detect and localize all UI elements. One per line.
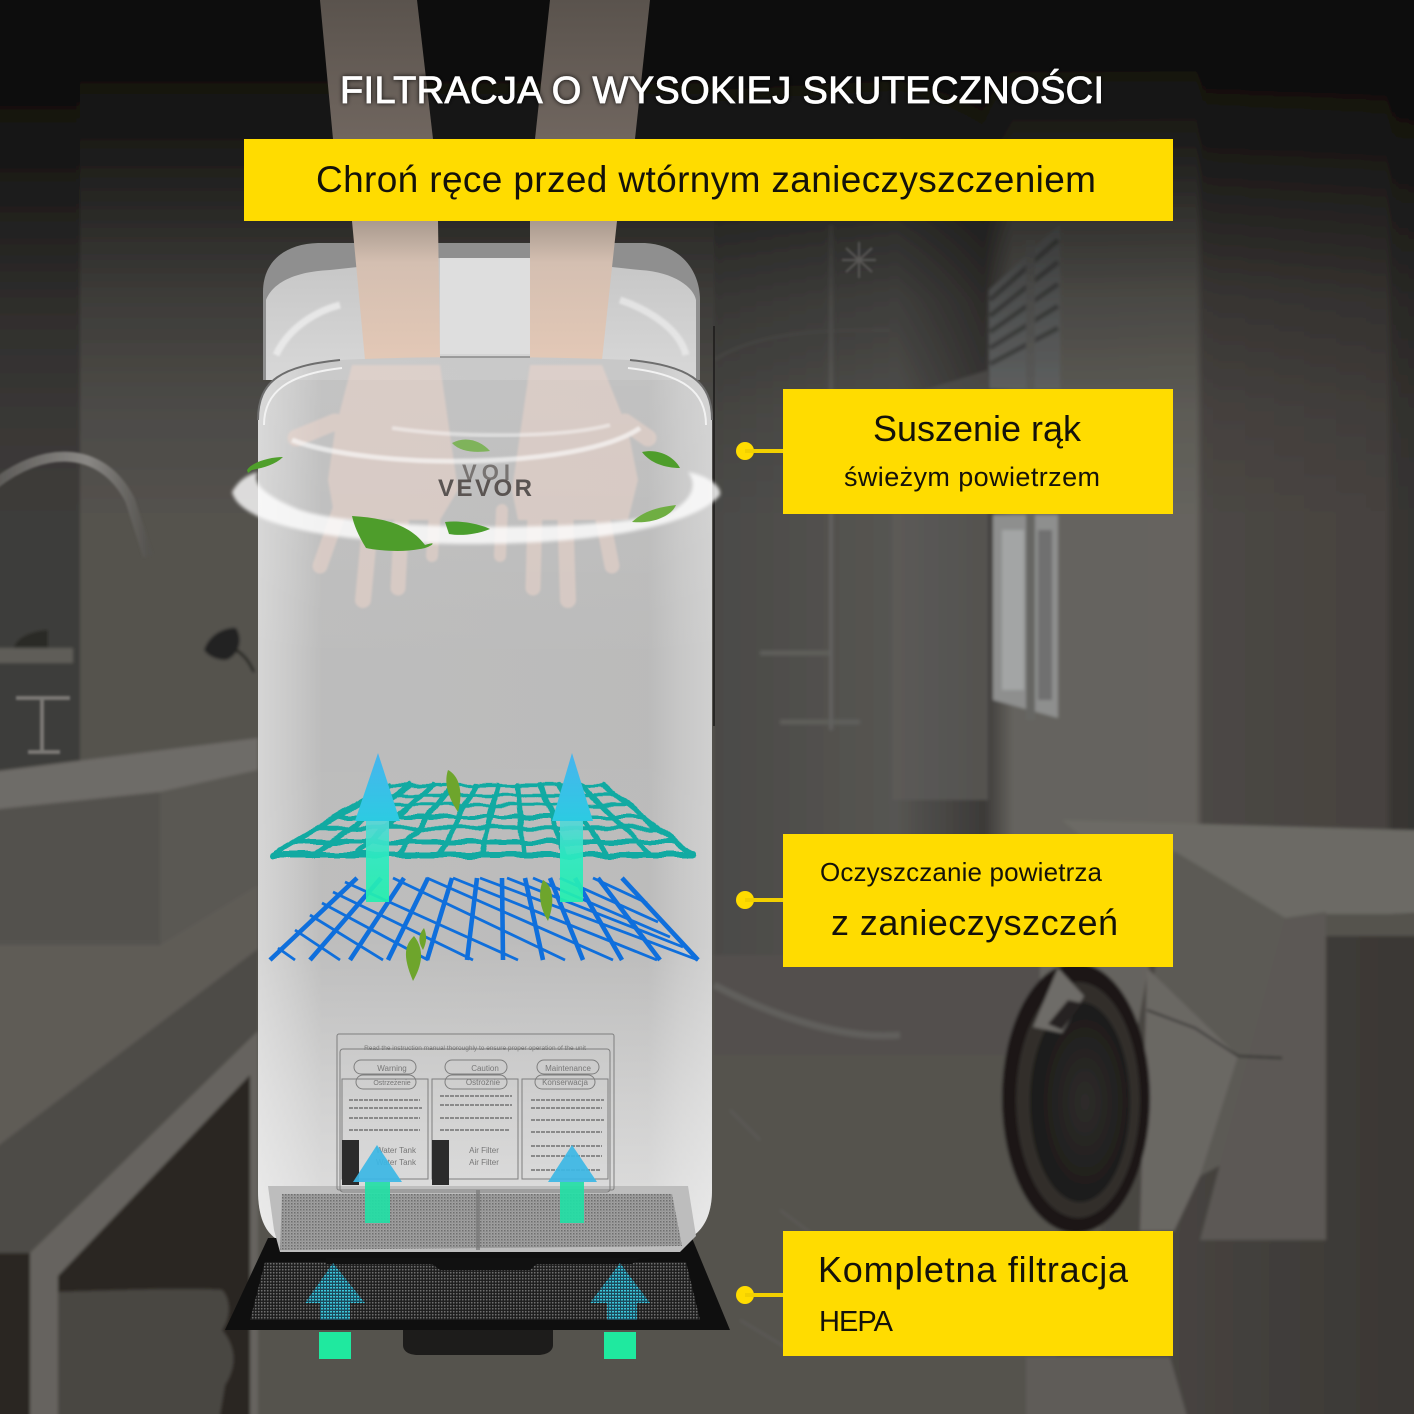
dryer main body bbox=[258, 326, 714, 1245]
background: lower table bbox=[0, 949, 258, 1414]
label text: Konserwacja bbox=[542, 1078, 588, 1087]
background: sink counter bbox=[0, 738, 258, 1152]
green square: right bbox=[604, 1332, 636, 1359]
connector: HEPA bbox=[736, 1286, 783, 1304]
hands seen through dryer bbox=[296, 365, 648, 600]
background: window pane bbox=[993, 515, 1058, 720]
VEVOR logo on dryer: VEVOR bbox=[438, 475, 532, 502]
callout: complete HEPA filtration: HEPA bbox=[819, 1306, 894, 1338]
label text: Air Filter bbox=[469, 1158, 499, 1167]
green square: left bbox=[319, 1332, 351, 1359]
callout: hand drying with fresh air: Suszenie rąk bbox=[873, 408, 1082, 449]
callout: hand drying with fresh air: świeżym powietrzem bbox=[844, 462, 1100, 492]
label text: Ostrożnie bbox=[466, 1078, 501, 1087]
airflow rings bbox=[232, 425, 720, 544]
callout: air cleaning: z zanieczyszczeń bbox=[831, 902, 1118, 943]
label text: Maintenance bbox=[545, 1064, 591, 1073]
lower HEPA mesh bbox=[250, 1262, 700, 1320]
arm: left forearm bbox=[352, 221, 440, 360]
left hand bbox=[296, 365, 458, 600]
background: washer door bbox=[1002, 963, 1150, 1233]
lower mesh frame bbox=[225, 1238, 730, 1330]
frame handle bbox=[403, 1330, 553, 1355]
dryer upper cap bbox=[263, 243, 700, 380]
leaves on filters bbox=[406, 770, 552, 981]
callout: complete HEPA filtration bbox=[783, 1231, 1173, 1356]
label text: Caution bbox=[471, 1064, 499, 1073]
background: lighter shower wall bbox=[892, 370, 988, 800]
title: FILTRACJA O WYSOKIEJ SKUTECZNOŚCI bbox=[340, 67, 1104, 112]
arrow: upper left airflow bbox=[355, 753, 400, 902]
background: ceiling light bbox=[842, 242, 876, 278]
arrow: lower left airflow bbox=[353, 1145, 402, 1223]
label text: Water Tank bbox=[376, 1158, 417, 1167]
right hand bbox=[500, 365, 648, 600]
label text: Water Tank bbox=[376, 1146, 417, 1155]
connector: fresh air bbox=[736, 442, 783, 460]
connector: air cleaning bbox=[736, 891, 783, 909]
subtitle banner: Chroń ręce przed wtórnym zanieczyszczeniem bbox=[316, 159, 1096, 200]
label text: Warning bbox=[377, 1064, 407, 1073]
arrow: lower right airflow bbox=[548, 1145, 597, 1223]
instruction label bbox=[337, 1034, 614, 1192]
background: washing machine bbox=[1002, 820, 1414, 1414]
background: wall tap bbox=[16, 698, 70, 752]
background: window blinds bbox=[989, 224, 1060, 720]
arrow: upper right airflow bbox=[552, 753, 593, 902]
background: shower pipe and ceiling light bbox=[714, 225, 890, 730]
arrow: mesh right airflow bbox=[590, 1263, 650, 1320]
VEVOR logo on dryer bbox=[438, 460, 532, 502]
background: right wall columns bbox=[714, 0, 1414, 1050]
background: faucet bbox=[0, 457, 148, 556]
background: wall shelf and soap bbox=[0, 630, 73, 663]
green leaves in airflow bbox=[247, 440, 680, 551]
arrow: mesh left airflow bbox=[305, 1263, 365, 1320]
arm: upper dim arms above the banner bbox=[320, 0, 650, 139]
label text: Air Filter bbox=[469, 1146, 499, 1155]
callout: air cleaning bbox=[783, 834, 1173, 967]
VEVOR logo on dryer: VOI bbox=[462, 460, 510, 485]
blue filter mesh bbox=[270, 878, 698, 960]
label dark tabs bbox=[342, 1140, 449, 1185]
subtitle banner bbox=[244, 139, 1173, 221]
label text: Read the instruction manual thoroughly to ensure proper operation of the unit bbox=[364, 1045, 586, 1052]
callout: air cleaning: Oczyszczanie powietrza bbox=[820, 857, 1103, 887]
arm: right forearm bbox=[530, 221, 617, 360]
background: left wall dark corner bbox=[0, 0, 80, 775]
label text bbox=[364, 1045, 591, 1167]
callout: hand drying with fresh air bbox=[783, 389, 1173, 514]
background: ceiling shadow bbox=[0, 0, 1414, 520]
teal filter mesh bbox=[272, 785, 693, 855]
upper HEPA mesh bbox=[268, 1186, 696, 1270]
callout: complete HEPA filtration: Kompletna filtracja bbox=[818, 1249, 1129, 1290]
background: floor bbox=[714, 955, 1040, 1414]
background: plant bbox=[204, 628, 254, 672]
label text: Ostrzeżenie bbox=[373, 1080, 411, 1087]
